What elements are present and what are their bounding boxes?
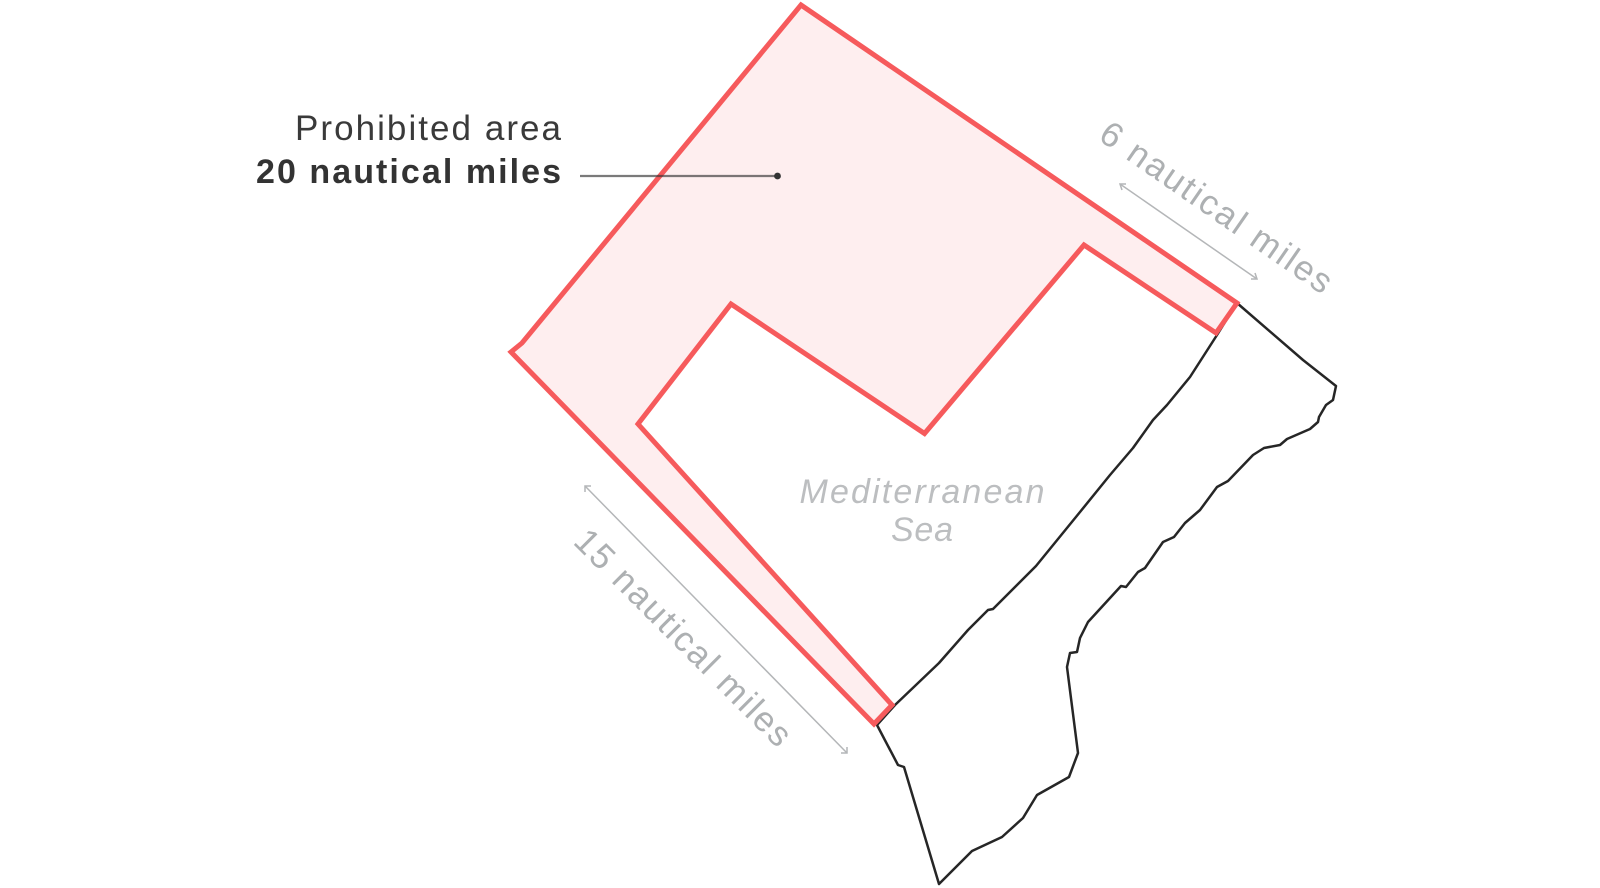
label: prohibited area: 20 nautical miles	[256, 153, 561, 191]
label: Mediterranean Sea: Sea	[891, 511, 953, 549]
label: prohibited area: Prohibited area	[295, 109, 562, 148]
arrow: 15 nautical miles	[585, 486, 847, 753]
map: prohibited area polygon	[511, 5, 1237, 724]
label: Mediterranean Sea: Mediterranean	[800, 473, 1044, 511]
label: 15 nautical miles: 15 nautical miles	[566, 521, 800, 754]
map: Gaza coastline outline	[877, 303, 1336, 884]
label: prohibited area	[256, 109, 562, 191]
label: Mediterranean Sea	[800, 473, 1044, 549]
arrow: 6 nautical miles	[1120, 184, 1257, 279]
leader line with dot	[580, 173, 781, 179]
label: 6 nautical miles: 6 nautical miles	[1092, 114, 1340, 302]
